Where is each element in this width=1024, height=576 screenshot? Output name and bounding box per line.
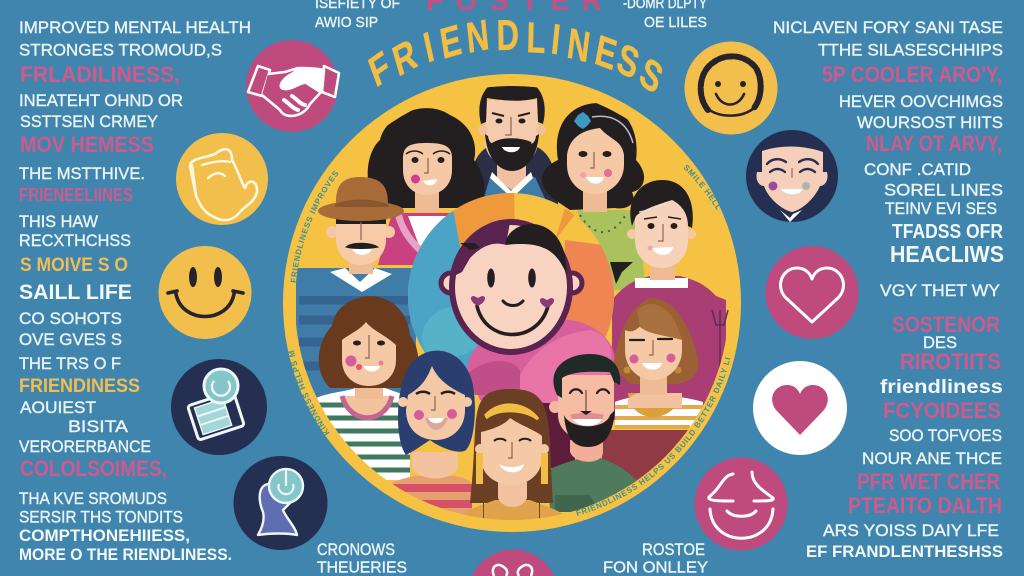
decorative ring microtext — [288, 165, 730, 516]
person: top right woman — [542, 103, 645, 290]
right text column: 5P COOLER ARO'Y, — [822, 62, 1002, 87]
person: right man — [612, 180, 726, 420]
icon: outlined heart — [766, 246, 858, 339]
left text column: COLOLSOIMES, — [20, 456, 167, 481]
left text column: THIS HAW — [19, 212, 98, 231]
right text column: DES — [923, 333, 957, 352]
right text column: FCYOIDEES — [883, 398, 1001, 423]
person: lower right woman — [600, 298, 728, 490]
icon: smiling man — [746, 130, 838, 222]
person: lower left brown-haired woman — [316, 296, 418, 480]
icon: curly-haired smiley — [684, 42, 778, 134]
icon: document with badge — [171, 359, 267, 455]
icon: yellow hand outline — [176, 133, 268, 225]
left text column: COMPTHONEHIIESS, — [19, 526, 190, 545]
right text column: SOREL LINES — [884, 180, 1003, 200]
right text column: WOURSOST HIITS — [857, 113, 1003, 132]
text: top left snippet — [315, 0, 400, 31]
left text column: AOUIEST — [20, 398, 96, 417]
right text column: TTHE SILASESCHHIPS — [818, 40, 1003, 60]
decorative ring microtext: KINDNESS HELPS MANY — [288, 350, 330, 436]
left text column: FRIENEELIINES — [19, 185, 133, 205]
text: bottom right caption — [603, 540, 708, 576]
text: bottom left caption: THEUERIES — [317, 560, 407, 576]
left text column: SSTTSEN CRMEY — [20, 112, 158, 131]
left text column: SAILL LIFE — [19, 281, 132, 304]
right text column: ARS YOISS DAIY LFE — [823, 521, 999, 540]
person: top centre man — [475, 86, 558, 204]
person: top left woman — [368, 108, 485, 265]
portrait ring — [283, 74, 741, 532]
left text column: BISITA — [68, 417, 129, 436]
left text column: FRLADILINESS, — [20, 62, 180, 87]
text: bottom left caption: CRONOWS — [317, 540, 395, 559]
decorative ring microtext: FRIENDLINESS HELPS US BUILD BETTER DAILY LIFE AND KINDER HEALTH — [576, 357, 730, 516]
right text column: HEACLIWS — [890, 241, 1004, 267]
right text column: EF FRANDLENTHESHSS — [806, 542, 1003, 561]
left text column: IMPROVED MENTAL HEALTH — [19, 18, 251, 37]
left text column: VERORERBANCE — [19, 437, 151, 456]
rainbow arch and body behind centre figure — [408, 193, 615, 403]
text: bottom right caption: ROSTOE — [642, 540, 705, 559]
left text column: STRONGES TROMOUD,S — [19, 40, 222, 60]
left text column: CO SOHOTS — [19, 309, 122, 328]
person: man with hat — [296, 177, 416, 403]
right text column: TFADSS OFR — [892, 221, 1003, 243]
text: bottom left caption — [317, 540, 407, 576]
person: beard man — [540, 354, 638, 512]
right text column: NOUR ANE THCE — [862, 449, 1002, 468]
left text column: RECXTHCHSS — [19, 231, 131, 250]
person: navy-haired woman — [391, 350, 475, 516]
icon: outline face — [694, 458, 788, 550]
right text column: PFR WET CHER — [857, 469, 1000, 494]
right text column: NICLAVEN FORY SANI TASE — [773, 18, 1003, 37]
icon: filled heart — [753, 361, 847, 455]
left text column: S MOIVE S O — [20, 255, 128, 276]
left text column: INEATEHT OHND OR — [19, 91, 183, 110]
icon: smiley — [158, 246, 252, 339]
left text column: MORE O THE RIENDLINESS. — [19, 545, 232, 564]
left text column: SERSIR THS TONDITS — [19, 508, 183, 526]
right text column: RIROTIITS — [900, 349, 1001, 374]
icon: handshake — [246, 40, 339, 132]
right text column: friendliness — [880, 377, 1003, 398]
text: top right snippet: OE LILES — [644, 14, 707, 31]
right text column: CONF .CATID — [864, 160, 971, 179]
left text column: FRIENDINESS — [19, 376, 140, 397]
right text column: TEINV EVI SES — [885, 199, 997, 218]
left text column: THA KVE SROMUDS — [19, 489, 167, 508]
text: bottom right caption: FON ONLLEY — [603, 560, 708, 576]
right text column: VGY THET WY — [880, 281, 1000, 300]
left text column — [19, 18, 251, 564]
right text column: SOO TOFVOES — [889, 426, 1002, 445]
text: top right snippet — [623, 0, 707, 31]
icon: figure with badge — [234, 456, 328, 550]
right text column — [773, 18, 1004, 561]
right text column: PTEAITO DALTH — [848, 493, 1002, 518]
heading: arched FRIENDLINESS: FRIENDLINESS — [363, 10, 668, 103]
left text column: OVE GVES S — [19, 330, 122, 349]
right text column: SOSTENOR — [892, 312, 1000, 337]
text: top left snippet: AWIO SIP — [315, 14, 378, 31]
icon: bottom cropped circle — [472, 550, 554, 576]
right text column: HEVER OOVCHIMGS — [839, 92, 1003, 111]
person: centre girl with headband — [463, 389, 563, 520]
left text column: THE TRS O F — [19, 354, 121, 373]
centre baby face — [441, 222, 582, 352]
left text column: MOV HEMESS — [20, 132, 154, 157]
left text column: THE MSTTHIVE. — [19, 164, 145, 183]
group portrait — [295, 77, 729, 540]
